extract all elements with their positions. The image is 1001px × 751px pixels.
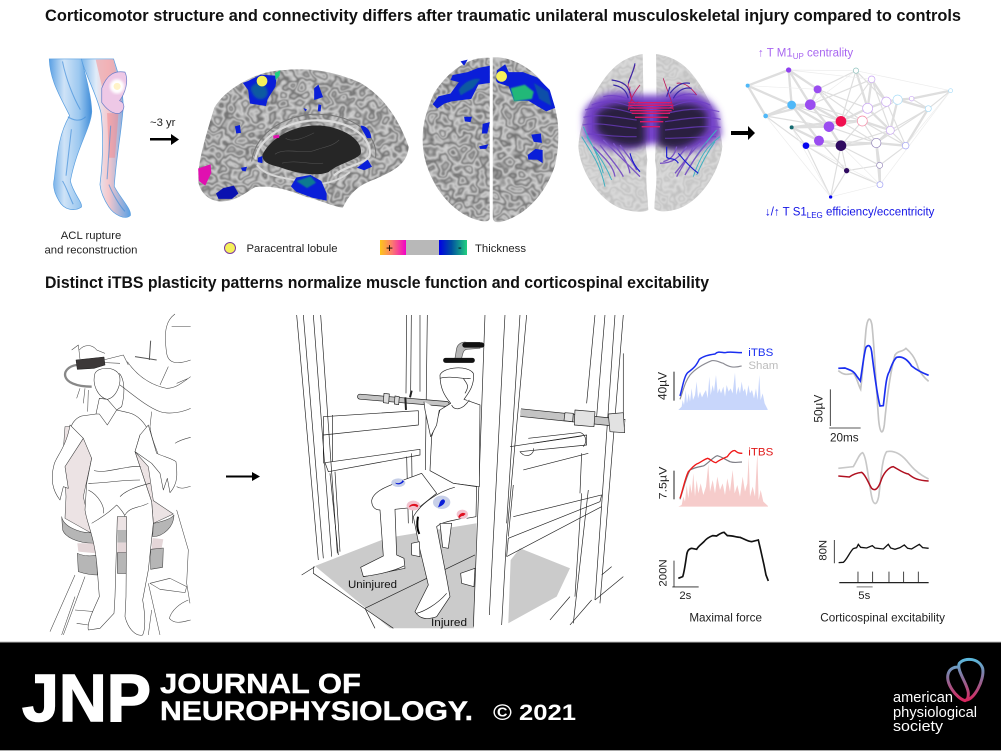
- torque trace: [818, 540, 929, 602]
- MEP quadriceps: 50µV: [813, 394, 826, 423]
- network label: S1 efficiency: ↓/↑ T S1: [765, 206, 807, 218]
- arrow: to network: [731, 126, 755, 140]
- frame: [297, 315, 623, 628]
- legend: paracentral lobule: Paracentral lobule: [246, 243, 338, 255]
- logo: American Physiological Society: physiological: [893, 704, 977, 721]
- torque trace: 5s: [858, 590, 871, 602]
- journal name: [160, 668, 473, 726]
- chair: [50, 427, 174, 635]
- chart: corticospinal excitability column: [813, 319, 945, 625]
- quadriceps EMG iTBS vs sham: [657, 347, 778, 410]
- legend: thickness color scale: +: [386, 241, 393, 255]
- bars: [360, 391, 625, 447]
- EMG sites: [391, 478, 468, 519]
- force trace: [657, 532, 768, 602]
- network label: M1 centrality: centrality: [804, 48, 853, 60]
- label: injured: Injured: [431, 617, 467, 629]
- brain: top view: [423, 57, 558, 222]
- coil: [65, 345, 128, 412]
- MEP quadriceps: [813, 319, 929, 444]
- network label: M1 centrality: UP: [793, 52, 804, 61]
- network nodes: filled: [746, 67, 849, 199]
- label: uninjured: Uninjured: [348, 579, 397, 591]
- person: [52, 368, 177, 635]
- coil: [446, 342, 482, 360]
- network label: S1 efficiency: LEG: [807, 211, 823, 220]
- copyright year: © 2021: [493, 700, 576, 725]
- network graph: [746, 67, 953, 199]
- quadriceps EMG iTBS vs sham: Sham: [748, 360, 778, 372]
- illustration: TMS seated subject: [50, 314, 191, 635]
- MEP quadriceps: 20ms: [830, 431, 859, 444]
- journal name: JOURNAL OF: [160, 668, 361, 699]
- caption: corticospinal excitability: Corticospinal excitability: [820, 612, 945, 625]
- brain: tractography: [578, 54, 722, 212]
- illustration: force testing apparatus: [297, 315, 625, 628]
- quadriceps EMG iTBS vs sham: iTBS: [748, 347, 774, 359]
- network edges: [748, 70, 951, 197]
- operator: [120, 314, 191, 622]
- muscle EMG iTBS vs sham: iTBS: [748, 446, 774, 458]
- force trace: 200N: [657, 559, 669, 587]
- caption: maximal force: Maximal force: [689, 612, 762, 625]
- legend: thickness color scale: -: [458, 242, 462, 254]
- probe: [135, 341, 157, 360]
- network nodes: hollow: [853, 68, 953, 188]
- brain: medial view: [198, 69, 409, 208]
- footer banner: [0, 642, 1001, 751]
- arrow: three years later: [150, 117, 179, 145]
- text: ACL rupture and reconstruction: ACL rupture: [61, 230, 121, 242]
- quadriceps EMG iTBS vs sham: 40µV: [657, 372, 670, 400]
- logo: American Physiological Society: american: [893, 689, 953, 706]
- steps: [412, 542, 475, 587]
- network label: S1 efficiency: efficiency/eccentricity: [823, 206, 935, 218]
- icon: injured legs: [49, 59, 130, 217]
- logo: American Physiological Society: [893, 659, 983, 735]
- text: ACL rupture and reconstruction: and reconstruction: [45, 244, 137, 256]
- title: structure and connectivity: Corticomotor structure and connectivity differs after traumatic unilateral musculoskeletal injury compared to controls: [45, 7, 961, 25]
- legend: thickness color scale: [380, 240, 526, 255]
- arrow: three years later: ~3 yr: [150, 117, 176, 129]
- person: [361, 368, 480, 619]
- MEP muscle: [838, 451, 929, 504]
- floor: [315, 523, 570, 628]
- network label: M1 centrality: ↑ T M1: [758, 48, 793, 60]
- title: iTBS plasticity: Distinct iTBS plasticity patterns normalize muscle function and corticospinal excitability: [45, 274, 709, 292]
- logo: American Physiological Society: society: [893, 718, 944, 735]
- chart: maximal force column: [657, 347, 778, 625]
- force trace: 2s: [679, 590, 692, 602]
- logo: JNP: JNP: [22, 661, 151, 736]
- legend: thickness color scale: Thickness: [475, 243, 526, 255]
- muscle EMG iTBS vs sham: [658, 446, 774, 507]
- muscle EMG iTBS vs sham: 7.5µV: [658, 466, 670, 499]
- torque trace: 80N: [818, 540, 830, 561]
- text: ACL rupture and reconstruction: [45, 230, 137, 256]
- journal name: NEUROPHYSIOLOGY.: [160, 696, 473, 726]
- arrow: to protocol: [226, 472, 260, 481]
